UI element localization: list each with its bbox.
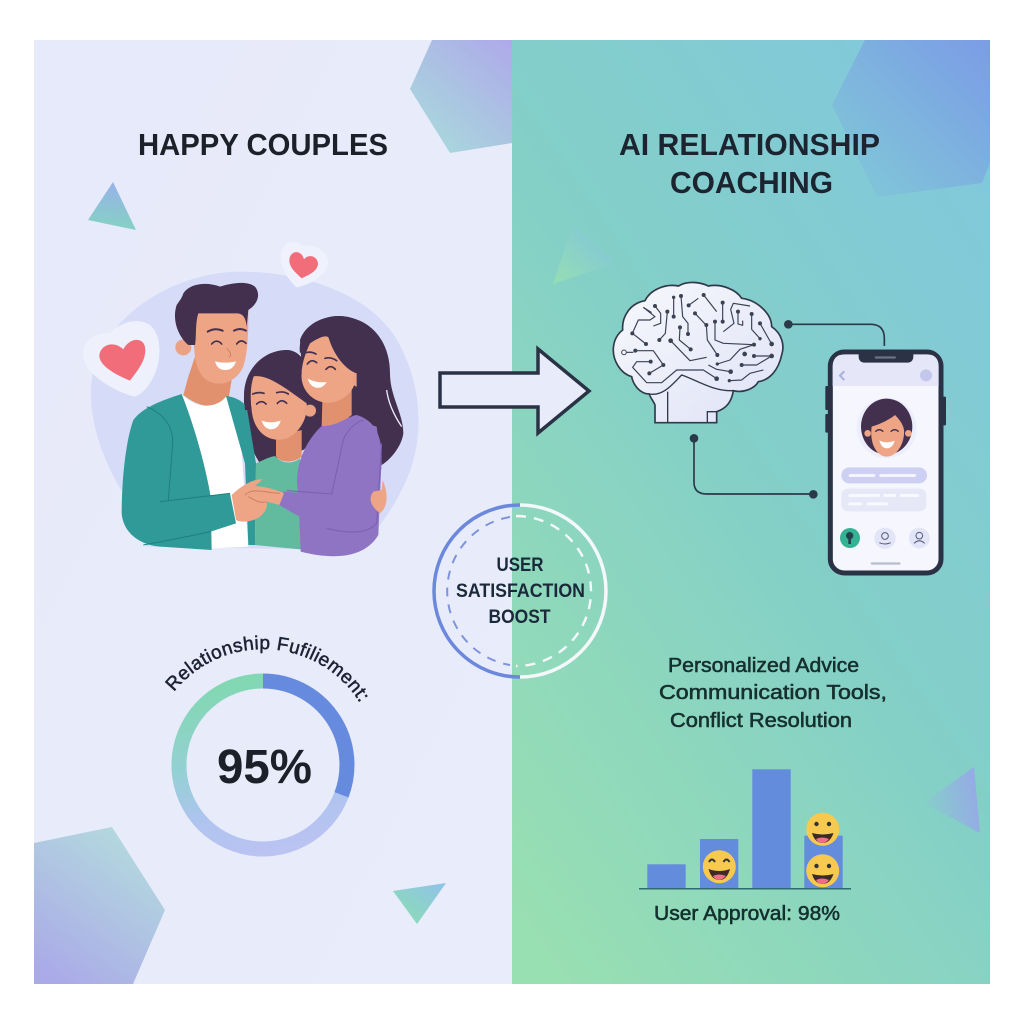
icon: small heart [281, 242, 328, 287]
man sleeve [160, 493, 236, 545]
woman hair front [300, 316, 388, 410]
phone [825, 352, 946, 573]
text block: coaching features: Conflict Resolution [670, 710, 852, 732]
decoration: triangle upper left [88, 182, 136, 230]
girl green shirt [255, 456, 307, 550]
bar chart: user approval [639, 769, 851, 890]
man hair [175, 283, 258, 345]
phone avatar [857, 398, 917, 458]
illustration: happy family with hearts [83, 242, 419, 556]
woman face [301, 336, 357, 403]
man face [194, 310, 248, 384]
illustration: circuit brain linked to phone [613, 282, 946, 573]
clasped hands [232, 479, 284, 522]
decoration: hexagon bottom left panel [34, 827, 165, 984]
decoration: triangle upper right panel [553, 225, 615, 284]
label: relationship fulfilment curved text: Relationship Fufiliement: [164, 635, 368, 702]
text block: coaching features: Personalized Advice [668, 655, 859, 677]
heading: AI relationship coaching [619, 127, 880, 200]
brain circuits [627, 295, 772, 383]
heading: AI relationship coaching: COACHING [670, 165, 833, 200]
woman neck [322, 387, 352, 427]
donut chart: 95% [179, 681, 347, 849]
connector: brain to phone top [784, 320, 884, 346]
phone buttons [840, 528, 930, 565]
man eyes and smile [208, 329, 246, 344]
man ear [175, 339, 191, 355]
panel: AI relationship coaching background [512, 40, 990, 984]
badge: user satisfaction boost: SATISFACTION [456, 580, 585, 602]
woman hair back [300, 316, 403, 465]
badge: user satisfaction boost: BOOST [488, 606, 551, 628]
text block: coaching features [659, 655, 887, 732]
girl neck [276, 430, 302, 462]
backdrop blob [91, 272, 419, 550]
icon: large heart [83, 321, 160, 397]
decoration: hexagon top left panel [410, 40, 512, 153]
badge: user satisfaction boost [434, 505, 606, 677]
heading: happy couples: HAPPY COUPLES [138, 127, 388, 162]
brain [613, 282, 783, 423]
text block: coaching features: Communication Tools, [659, 682, 887, 704]
decoration: triangle lower left [393, 883, 446, 924]
woman eyes and smile [304, 352, 337, 369]
emoji: top smile [806, 813, 839, 846]
panel: happy couples background [34, 40, 512, 984]
girl hair top [245, 350, 313, 410]
emoji: bottom smile [806, 854, 839, 887]
woman purple sweater [297, 415, 382, 556]
man neck [183, 357, 233, 406]
caption: user approval 98%: User Approval: 98% [654, 903, 840, 925]
girl hair back [244, 350, 327, 463]
man white tee [182, 394, 248, 548]
emoji: laughing face [703, 850, 736, 883]
decoration: triangle lower right panel [923, 767, 980, 833]
badge: user satisfaction boost: USER [496, 554, 544, 576]
arrow [440, 349, 589, 433]
girl face [251, 376, 307, 440]
heading: AI relationship coaching: AI RELATIONSHIP [619, 127, 880, 162]
man teal jacket [122, 394, 212, 550]
woman hand on back [371, 480, 387, 513]
decoration: hexagon top right panel [832, 40, 990, 197]
donut chart: 95%: 95% [217, 741, 312, 794]
phone message bubbles [841, 467, 927, 511]
girl eyes and smile [253, 392, 288, 404]
connector: brain to phone bottom [690, 434, 818, 499]
